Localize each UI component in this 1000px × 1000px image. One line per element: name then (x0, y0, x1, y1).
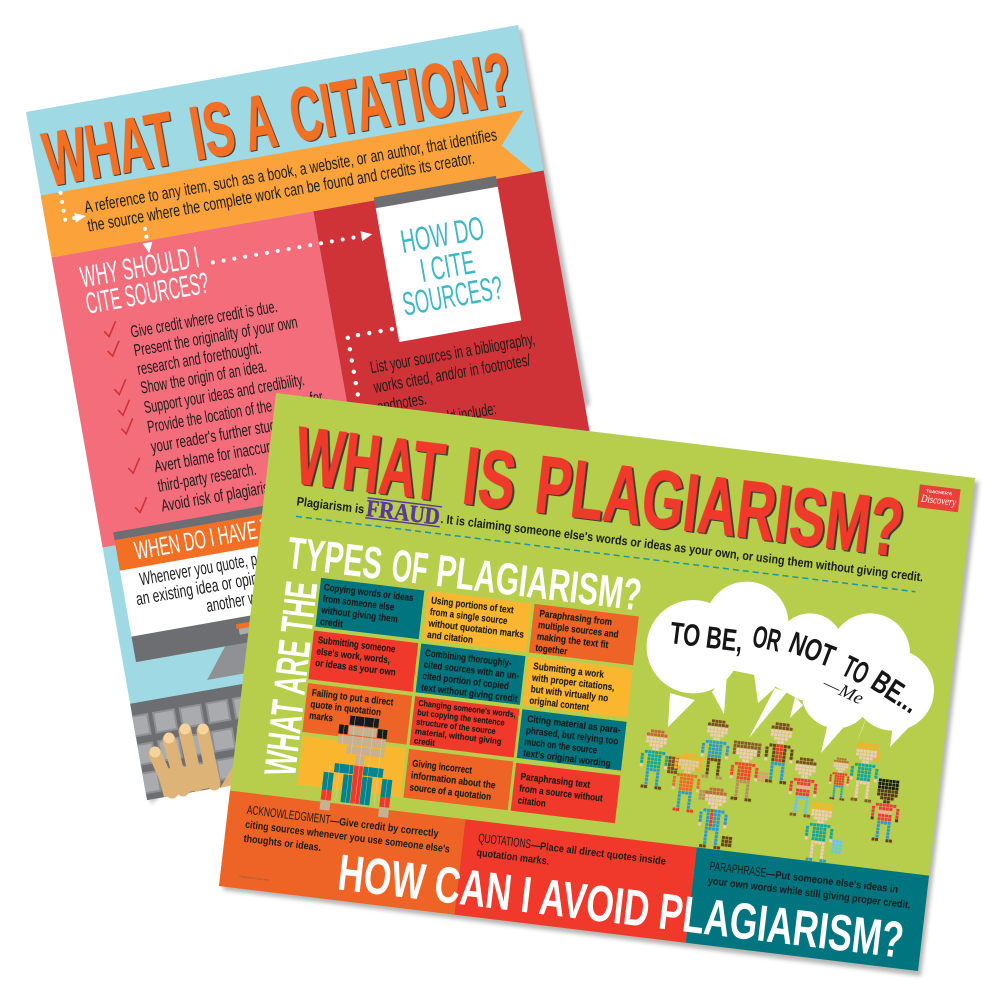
cell: copying words: Copying words or ideas (323, 582, 414, 604)
list: reasons to cite: research and forethought. (136, 338, 263, 379)
arrow: why to how (212, 229, 373, 267)
cell: changing words: but copying the sentence (417, 707, 506, 728)
cell: using portions: from a single source (429, 607, 508, 627)
monitor: Whenever you quote, paraphrase, or summarize (138, 527, 384, 589)
person: blond teal shirt with bag (804, 802, 843, 864)
panel: why should I cite (52, 211, 364, 547)
quote: to be or not to be: NOT (784, 625, 840, 674)
pixel people group (637, 718, 903, 865)
panel: paraphrase: PARAPHRASE (709, 859, 767, 880)
icon: hand on keyboard (150, 724, 255, 797)
cell: using portions: without quotation marks (427, 618, 525, 641)
panel: acknowledgment: thoughts or ideas. (243, 833, 322, 854)
logo: TEACHER'S (926, 488, 953, 496)
panel: quotations: QUOTATIONS (477, 831, 532, 851)
text: how to cite list: endnotes. (376, 389, 428, 417)
person: dark hair striped shirt (870, 778, 900, 844)
cell: citing material (517, 709, 627, 771)
cell: citing material: text's original wording (523, 748, 611, 770)
cell: paraphrasing from multiple: Paraphrasing from (539, 609, 613, 628)
cell: paraphrasing from multiple: making the text fit (536, 631, 610, 651)
poster: what is a citation (26, 25, 639, 800)
list: reasons to cite: Provide the location of the source for (146, 387, 324, 437)
cell: failing to quote: Failing to put a direct (311, 688, 394, 709)
cell: using portions: Using portions of text (431, 595, 515, 616)
monitor: an existing idea or opinion, cite (134, 561, 300, 609)
cell: changing words: structure of the source (416, 717, 496, 736)
front poster shadow (223, 397, 979, 976)
arrow: how to list (348, 329, 416, 476)
person: striped shirt (788, 757, 818, 818)
person: blond girl orange shirt (672, 752, 710, 814)
quote: to be or not to be: OR (750, 619, 784, 659)
cell: combining: text without giving credit (421, 682, 519, 705)
list: reasons to cite: Present the originality of your own (132, 313, 299, 360)
icons: check marks (103, 321, 149, 513)
panel: quotations: quotation marks. (476, 847, 550, 868)
cell: combining: Combining thoroughly- (424, 648, 512, 670)
poster: what is plagiarism (219, 393, 975, 971)
definition text: FRAUD (365, 496, 441, 531)
cell: paraphrasing text: from a source without (519, 783, 604, 805)
ribbon text: the source where the complete work can be found and credits its creator. (86, 149, 476, 236)
cell: combining: cited portion of copied (422, 671, 509, 692)
list: reasons to cite: Avoid risk of plagiarism. (160, 476, 283, 516)
cell: failing to quote (302, 683, 412, 745)
panel: paraphrase: —Put someone else's ideas in (765, 868, 899, 896)
cell: copying words: without giving them (320, 605, 399, 625)
cell: combining (416, 643, 525, 705)
cell: giving incorrect (403, 749, 513, 810)
title: what is plagiarism: IS (459, 431, 521, 527)
cell: using portions: and citation (427, 630, 474, 646)
card: how do I cite sources (374, 176, 521, 342)
text: how to cite list (368, 329, 547, 438)
arrow: ribbon to why (140, 228, 154, 254)
title: what is a citation: IS (184, 86, 241, 177)
cell: submitting a work: Submitting a work (533, 661, 605, 681)
text: how to cite list: works cited, and/or in footnotes/ (372, 350, 532, 397)
person: blue shirt talking (700, 719, 730, 780)
panel: how do I cite (313, 170, 595, 501)
text: how to cite list: List your sources in a bibliography, (369, 329, 536, 377)
person: brown jacket (764, 722, 794, 785)
back poster shadow (30, 29, 590, 804)
grid: types of plagiarism (296, 578, 639, 823)
quote: to be or not to be (668, 615, 926, 720)
title: what is a citation (37, 37, 519, 203)
cell: giving incorrect: source of a quotation (409, 782, 492, 803)
person: blue jacket with tie (698, 787, 733, 850)
list: reasons to cite: Show the origin of an idea. (139, 357, 268, 398)
list: reasons to cite: your reader's further study. (149, 414, 285, 457)
panel: acknowledgment (219, 791, 465, 915)
cell: giving incorrect: information about the (410, 770, 496, 792)
quote: to be or not to be: TO BE, (668, 615, 745, 659)
definition text: . It is claiming someone else's words or ideas as your own, or using them without giving credit. (440, 512, 924, 584)
heading: types of plagiarism: TYPES (285, 527, 385, 589)
list: reasons to cite (129, 292, 338, 516)
title: what is a citation: A (237, 78, 282, 167)
quote: to be or not to be: TO (837, 649, 875, 691)
cell: paraphrasing from multiple (529, 604, 639, 666)
panel: paraphrase: your own words while still giving proper credit. (707, 875, 911, 912)
speech bubble (647, 582, 934, 753)
heading: types of plagiarism: OF (389, 540, 431, 595)
list: reasons to cite: Give credit where credit is due. (129, 297, 279, 342)
definition text (295, 487, 925, 589)
cell: yellow with pixel boy (297, 736, 406, 797)
ribbon (41, 110, 535, 257)
cell: using portions (423, 591, 532, 653)
person: teal shirt with backpack (640, 729, 680, 790)
title: what is plagiarism: WHAT (291, 410, 449, 519)
panel: acknowledgment: ©Teacher's Discovery (239, 874, 270, 882)
cell: paraphrasing text (511, 763, 620, 823)
logo: Discovery (920, 493, 957, 509)
cell: copying words: credit (319, 617, 344, 630)
text: how to cite list: Sources should include: (379, 399, 498, 438)
list: reasons to cite: third-party research. (156, 460, 258, 496)
cell: paraphrasing text: Paraphrasing text (520, 772, 591, 791)
heading: what are the: WHAT ARE THE (254, 579, 327, 779)
cell: submitting a work: but with virtually no (530, 684, 609, 704)
cell: combining: cited sources with an un- (423, 660, 520, 682)
cell: changing words: credit (413, 735, 436, 748)
monitor stand (202, 589, 542, 680)
person: small red shirt (828, 758, 850, 802)
definition text: Plagiarism is (296, 494, 365, 517)
cell: submitting a work: original content (529, 696, 590, 714)
keyboard (130, 617, 639, 800)
heading: types of plagiarism (285, 527, 644, 620)
cell: submitting someone: else's work, words, (316, 646, 391, 666)
logo (917, 484, 961, 512)
ribbon text: A reference to any item, such as a book, a website, or an author, that identifies (83, 125, 498, 217)
heading: why should I cite sources: CITE SOURCES? (83, 267, 211, 321)
cell: citing material: Citing material as para- (527, 714, 621, 736)
cell: paraphrasing from multiple: together (535, 643, 568, 658)
quote: to be or not to be: BE... (865, 664, 926, 720)
cell: paraphrasing from multiple: multiple sources and (537, 620, 619, 641)
monitor: WHEN DO I HAVE TO CITE? (132, 502, 329, 566)
heading: why should I cite sources (78, 240, 211, 321)
cell: copying words (315, 578, 424, 640)
panel: acknowledgment: —Give credit by correctly (330, 815, 439, 840)
panel: paraphrase (686, 847, 929, 971)
cell: copying words: from someone else (322, 594, 395, 613)
panel: quotations: —Place all direct quotes inside (530, 839, 667, 868)
card: how do I cite sources: SOURCES? (400, 269, 505, 323)
cell: changing words (410, 696, 519, 758)
icon: large pixel boy (319, 713, 399, 818)
cell: citing material: phrased, but relying too (525, 725, 619, 748)
panel: quotations (454, 819, 697, 943)
card: how do I cite sources: HOW DO (398, 209, 487, 260)
heading: why should I cite sources: WHY SHOULD I (78, 241, 202, 294)
list: reasons to cite: Avert blame for inaccuracies on (153, 430, 313, 476)
person: curly hair red shirt (730, 740, 769, 802)
monitor (113, 450, 602, 662)
cell: failing to quote: marks (309, 711, 334, 724)
cell: submitting someone: or ideas as your own (315, 658, 396, 679)
panel: acknowledgment: citing sources whenever you use someone else's (245, 819, 451, 856)
cell: changing words: material, without giving (415, 726, 502, 746)
cell: paraphrasing text: citation (517, 795, 546, 810)
person: blond teal top (850, 742, 881, 804)
cell: submitting someone (308, 630, 418, 692)
cell: submitting someone: Submitting someone (317, 635, 396, 655)
cell: submitting a work (523, 657, 633, 718)
cell: submitting a work: with proper citations, (531, 673, 615, 694)
cell: failing to quote: quote in quotation (310, 699, 382, 719)
heading: types of plagiarism: PLAGIARISM? (434, 545, 644, 620)
quote: to be or not to be: —Me (819, 672, 867, 708)
panel: acknowledgment: ACKNOWLEDGMENT (246, 803, 331, 827)
card: how do I cite sources: I CITE (417, 243, 478, 289)
arrow: ribbon to definition (61, 189, 87, 225)
title: what is a citation: WHAT (37, 96, 181, 203)
cell: changing words: Changing someone's words, (418, 698, 516, 719)
title: what is plagiarism (291, 410, 908, 574)
cell: citing material: much on the source (524, 737, 598, 757)
poster background (26, 25, 639, 800)
title: what is a citation: CITATION? (283, 37, 519, 159)
list: reasons to cite: Support your ideas and credibility. (142, 370, 306, 417)
poster background (219, 393, 975, 971)
cell: giving incorrect: Giving incorrect (412, 758, 473, 777)
monitor: another writer's work. (205, 577, 316, 616)
